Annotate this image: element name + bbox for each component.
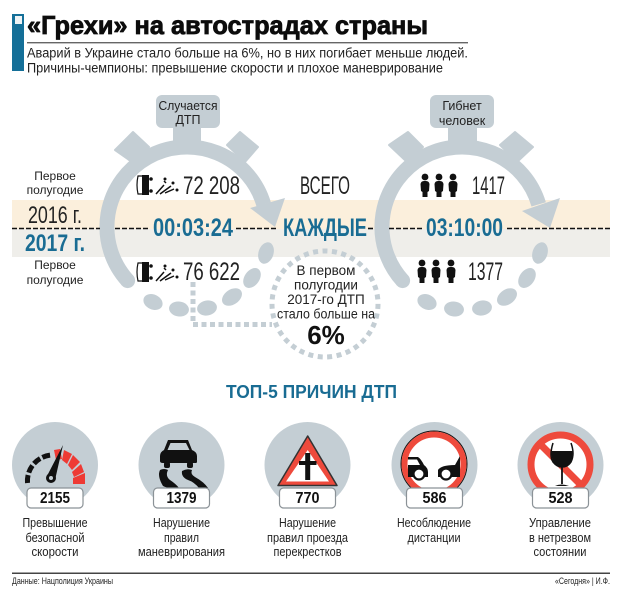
- stopwatch label: accidents: Случается: [158, 99, 218, 113]
- subtitle: Причины-чемпионы: превышение скорости и плохое маневрирование: [27, 60, 443, 76]
- year 2016: 2016 г.: [28, 202, 82, 229]
- cause 1: speeding: безопасной: [26, 531, 85, 545]
- dashed divider: [12, 228, 610, 230]
- count: deaths 2016: 1417: [472, 172, 505, 200]
- interval: accidents: 00:03:24: [153, 214, 233, 242]
- icon: crash 2017: [137, 262, 178, 282]
- cause 4: distance: [392, 422, 478, 545]
- callout: 6 percent: стало больше на: [277, 306, 375, 322]
- cause 2: manoeuvring: маневрирования: [138, 545, 225, 559]
- cause 1: speeding: скорости: [32, 545, 79, 559]
- title: «Грехи» на автострадах страны: [27, 10, 428, 40]
- year 2017: 2017 г.: [25, 230, 85, 257]
- interval: deaths: 03:10:00: [426, 214, 503, 242]
- stopwatch label: accidents: ДТП: [175, 113, 201, 127]
- cause 3: intersections: перекрестков: [274, 545, 342, 559]
- period label 2016: Первое: [34, 169, 76, 183]
- cause 2: manoeuvring: Нарушение: [153, 516, 210, 530]
- cause 1: speeding: [12, 422, 98, 559]
- cause 2: manoeuvring: 1379: [166, 490, 197, 507]
- subtitle: [27, 46, 468, 76]
- cause 5: drunk driving: [518, 422, 604, 559]
- period label 2016: полугодие: [27, 183, 84, 197]
- count: accidents 2016: 72 208: [183, 172, 240, 200]
- cause 3: intersections: 770: [296, 490, 320, 507]
- dashed connector: [193, 282, 272, 324]
- stopwatch label: accidents: [158, 99, 218, 127]
- word: total: ВСЕГО: [300, 172, 350, 200]
- source: Данные: Нацполиция Украины: [12, 576, 113, 587]
- icon: speedometer: [27, 445, 85, 484]
- cause 5: drunk driving: состоянии: [534, 545, 587, 559]
- stopwatch: deaths: [382, 95, 560, 318]
- header accent bar: [12, 14, 24, 71]
- cause 5: drunk driving: в нетрезвом: [529, 531, 591, 545]
- count: deaths 2017: 1377: [468, 258, 503, 286]
- callout: 6 percent: полугодии: [294, 278, 358, 292]
- icon: people 2017: [418, 260, 456, 283]
- year bands: [12, 200, 610, 257]
- period label 2017: [27, 258, 84, 287]
- callout: 6 percent: [272, 251, 378, 357]
- cause 4: distance: 586: [422, 490, 447, 507]
- cause 4: distance: дистанции: [408, 531, 461, 545]
- cause 2: manoeuvring: правил: [164, 531, 199, 545]
- cause 5: drunk driving: Управление: [529, 516, 591, 530]
- stopwatch label: deaths: Гибнет: [442, 99, 482, 113]
- icon: no-alcohol sign: [531, 435, 590, 494]
- icon: skidding car: [159, 440, 208, 488]
- cause 2: manoeuvring: [138, 422, 225, 559]
- cause 3: intersections: Нарушение: [279, 516, 336, 530]
- period label 2016: [27, 169, 84, 197]
- icon: no-overtaking sign: [401, 431, 467, 497]
- icon: crossroads sign: [278, 436, 337, 486]
- cause 1: speeding: Превышение: [22, 516, 88, 530]
- icon: crash 2016: [137, 175, 178, 195]
- callout: 6 percent: 2017-го ДТП: [287, 292, 365, 307]
- word: every: КАЖДЫЕ: [283, 214, 367, 242]
- cause 4: distance: Несоблюдение: [397, 516, 471, 530]
- cause 3: intersections: [264, 422, 350, 559]
- cause 1: speeding: 2155: [40, 490, 70, 507]
- stopwatch label: deaths: человек: [439, 114, 486, 128]
- callout: 6 percent: В первом: [297, 263, 355, 278]
- cause 3: intersections: правил проезда: [267, 531, 348, 545]
- period label 2017: полугодие: [27, 273, 84, 287]
- count: accidents 2017: 76 622: [183, 258, 240, 286]
- stopwatch label: deaths: [439, 99, 486, 128]
- period label 2017: Первое: [34, 258, 76, 272]
- stopwatch: accidents: [107, 95, 285, 318]
- cause 5: drunk driving: 528: [548, 490, 573, 507]
- heading: top 5: ТОП-5 ПРИЧИН ДТП: [226, 381, 397, 402]
- icon: people 2016: [420, 174, 458, 197]
- callout: 6 percent: 6%: [307, 320, 345, 350]
- subtitle: Аварий в Украине стало больше на 6%, но в них погибает меньше людей.: [27, 46, 468, 60]
